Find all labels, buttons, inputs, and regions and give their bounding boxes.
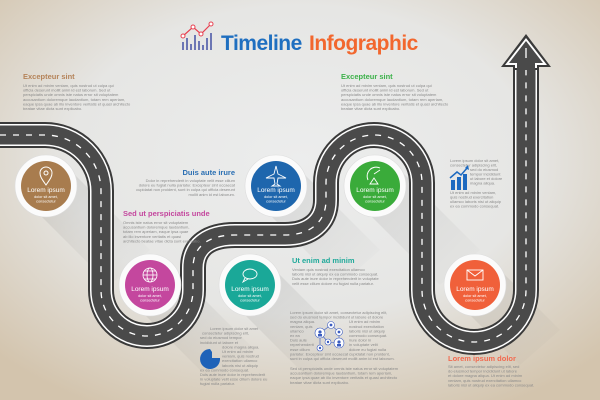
text: network block: commodo consequat. <box>349 333 387 338</box>
icon: plane <box>266 166 286 186</box>
icon: pie <box>200 349 220 369</box>
text: sed ut perspiciatis: ab illo inventore veritatis et quasi <box>123 234 181 239</box>
marker: orange <box>444 254 506 316</box>
text: excepteur sint right: Ut enim ad minim veniam, quis nostrud ut culpa qui <box>341 83 432 88</box>
text: side block with bar chart: consectetur adipiscing elit, <box>450 162 497 168</box>
text: pie block: laboris nisi ut aliquip <box>222 363 259 368</box>
text: network block: reprehenderit <box>290 342 315 347</box>
text: network block: pariatur. Excepteur sint occaecat cupidatat non proident, <box>290 351 390 356</box>
text: excepteur sint left: officia deserunt mollit anim id est laborum. Sed ut <box>23 88 111 93</box>
icon: mail <box>467 270 483 280</box>
text: pie block: sed do eiusmod tempor <box>200 335 242 340</box>
marker: brown: consectetur <box>36 200 57 204</box>
text: side block with bar chart <box>450 158 503 208</box>
text: pie block: Lorem ipsum dolor sit amet <box>210 326 259 331</box>
text: network block: Duis aute <box>290 338 308 343</box>
arrow head <box>501 34 551 70</box>
text: sed ut perspiciatis <box>123 209 210 243</box>
text: ut enim ad minim: Veniam quis nostrud exercitation ullamco <box>292 267 365 272</box>
text: duis aute irure: cupidatat non proident, sunt in culpa qui officia deserunt <box>136 187 236 192</box>
text: network block: sunt in culpa qui officia deserunt mollit anim id est laborum. <box>290 356 395 361</box>
text: lorem ipsum dolor: veniam, quis nostrud exercitation ullamco <box>448 378 522 383</box>
text: pie block: incididunt ut labore et <box>200 340 239 345</box>
text: network block <box>290 310 399 385</box>
text: network block: ex ea <box>290 333 301 338</box>
marker: teal: consectetur <box>240 298 261 302</box>
marker: brown <box>15 155 77 217</box>
text: duis aute irure <box>136 168 236 197</box>
text: excepteur sint left <box>23 72 131 111</box>
title <box>181 22 419 55</box>
text: side block with bar chart: quis nostrud exercitation <box>450 194 493 200</box>
text: excepteur sint right: Excepteur sint <box>341 72 393 81</box>
text: network block: magna aliqua. <box>290 319 315 324</box>
marker: orange: dolor sit amet, <box>463 294 487 298</box>
text: network block: Ut enim ad minim <box>349 319 381 324</box>
text: lorem ipsum dolor: Lorem ipsum dolor <box>448 354 516 363</box>
text: sed ut perspiciatis: totam rem aperiam, eaque ipsa quae <box>123 229 189 234</box>
text: sed ut perspiciatis: accusantium doloremque laudantium, <box>123 225 189 230</box>
marker: blue <box>245 155 307 217</box>
marker: brown: dolor sit amet, <box>34 195 58 199</box>
text: lorem ipsum dolor: laboris nisi ut aliquip ex ea commodo consequat. <box>448 382 534 387</box>
text: lorem ipsum dolor: Sit amet, consectetur adipiscing elit, sed <box>448 364 519 369</box>
title: Timeline <box>221 32 302 55</box>
text: pie block: in voluptate velit esse cillum dolore eu <box>200 377 267 382</box>
text: duis aute irure: dolore eu fugiat nulla pariatur. Excepteur sint occaecat <box>139 183 236 188</box>
title: Infographic <box>309 32 419 55</box>
text: side block with bar chart: ex ea commodo consequat. <box>450 204 499 208</box>
text: excepteur sint right: eaque ipsa quae ab illo inventore veritatis et quasi architecto <box>341 101 449 106</box>
text: lorem ipsum dolor: et dolore magna aliqua. Ut enim ad minim <box>448 373 523 378</box>
text: network block: accusantium doloremque laudantium, totam rem aperiam, <box>290 371 392 376</box>
text: network block: ullamco <box>290 328 305 333</box>
text: pie block: exercitation ullamco <box>222 358 258 363</box>
text: network block: in voluptate velit <box>349 342 379 347</box>
marker: green: dolor sit amet, <box>363 195 387 199</box>
text: lorem ipsum dolor <box>448 354 534 387</box>
marker: orange: consectetur <box>465 298 486 302</box>
text: pie block: fugiat nulla pariatur. <box>200 381 235 386</box>
text: ut enim ad minim: Duis aute irure dolor in reprehenderit in voluptate <box>292 276 379 281</box>
marker: pink: Lorem ipsum <box>131 286 169 293</box>
text: side block with bar chart: magna aliqua. <box>470 180 495 186</box>
marker: teal: dolor sit amet, <box>238 294 262 298</box>
text: network block: Lorem ipsum dolor sit amet, consectetur adipiscing elit, <box>290 310 387 315</box>
text: excepteur sint left: perspiciatis unde omnis iste natus error sit voluptatem <box>23 92 119 97</box>
text: pie block: dolore magna aliqua. <box>222 344 259 349</box>
text: side block with bar chart: sed do eiusmod <box>470 167 498 172</box>
text: pie block: Ut enim ad minim <box>222 349 254 354</box>
text: network block: nostrud exercitation <box>349 324 384 329</box>
text: excepteur sint right <box>341 72 449 111</box>
text: side block with bar chart: Ut enim ad minim veniam, <box>450 190 496 195</box>
text: side block with bar chart: ullamco laboris nisi ut aliquip <box>450 199 502 204</box>
text: pie block <box>200 326 267 386</box>
text: pie block: ex ea commodo consequat. <box>200 367 249 372</box>
marker: pink: dolor sit amet, <box>138 294 162 298</box>
icon: network <box>315 322 344 351</box>
text: excepteur sint left: eaque ipsa quae ab illo inventore veritatis et quasi architecto <box>23 101 131 106</box>
marker: brown: Lorem ipsum <box>27 187 65 194</box>
icon: satellite <box>367 167 380 184</box>
marker: pink: consectetur <box>140 298 161 302</box>
text: duis aute irure: mollit anim id est laborum. <box>189 192 235 197</box>
text: duis aute irure: Dolor in reprehenderit in voluptate velit esse cillum <box>146 178 236 183</box>
text: excepteur sint right: accusantium doloremque laudantium, totam rem aperiam, <box>341 97 443 102</box>
marker: green: consectetur <box>365 200 386 204</box>
marker: blue: dolor sit amet, <box>264 195 288 199</box>
text: side block with bar chart: ut labore et dolore <box>470 176 503 181</box>
text: excepteur sint left: Excepteur sint <box>23 72 75 81</box>
text: excepteur sint right: perspiciatis unde omnis iste natus error sit voluptatem <box>341 92 437 97</box>
marker: green: Lorem ipsum <box>356 187 394 194</box>
text: ut enim ad minim: laboris nisi ut aliquip ex ea commodo consequat. <box>292 272 378 277</box>
text: excepteur sint left: beatae vitae dicta sunt explicabo. <box>23 106 82 111</box>
text: excepteur sint left: Ut enim ad minim veniam, quis nostrud ut culpa qui <box>23 83 114 88</box>
text: excepteur sint left: accusantium doloremque laudantium, totam rem aperiam, <box>23 97 125 102</box>
text: ut enim ad minim <box>292 256 379 286</box>
text: network block: sed do eiusmod tempor incididunt ut labore et dolore <box>290 315 384 320</box>
marker: teal <box>219 254 281 316</box>
marker: green <box>344 155 406 217</box>
text: excepteur sint right: officia deserunt mollit anim id est laborum. Sed ut <box>341 88 429 93</box>
text: pie block: veniam, quis nostrud <box>222 354 259 359</box>
text: sed ut perspiciatis: architecto beatae vitae dicta sunt explicabo. <box>123 238 201 243</box>
text: ut enim ad minim: Ut enim ad minim <box>292 256 355 265</box>
text: sed ut perspiciatis: Sed ut perspiciatis unde <box>123 209 210 218</box>
text: lorem ipsum dolor: do eiusmod tempor incididunt ut labore <box>448 369 518 374</box>
text: duis aute irure: Duis aute irure <box>182 168 235 177</box>
text: ut enim ad minim: velit esse cillum dolore eu fugiat nulla pariatur. <box>292 281 374 286</box>
text: side block with bar chart: Lorem ipsum dolor sit amet, <box>450 158 499 163</box>
icon: chat <box>243 269 257 282</box>
text: sed ut perspiciatis: Omnis iste natus error sit voluptatem <box>123 220 189 225</box>
text: network block: Sed ut perspiciatis unde omnis iste natus error sit voluptatem <box>290 366 399 371</box>
marker: pink <box>119 254 181 316</box>
text: network block: irure dolor in <box>349 338 371 343</box>
icon: bar chart <box>450 165 469 190</box>
marker: orange: Lorem ipsum <box>456 286 494 293</box>
text: pie block: consectetur adipiscing elit, <box>202 331 249 336</box>
icon: chart <box>181 22 213 50</box>
text: pie block: Duis aute irure dolor in reprehenderit <box>200 372 266 377</box>
text: network block: laboris nisi ut aliquip <box>349 328 386 333</box>
marker: teal: Lorem ipsum <box>231 286 269 293</box>
road <box>0 66 526 342</box>
icon: globe <box>143 268 157 282</box>
marker: blue: consectetur <box>266 200 287 204</box>
text: network block: beatae vitae dicta sunt explicabo. <box>290 380 349 385</box>
text: side block with bar chart: tempor incididunt <box>470 172 501 176</box>
text: network block: eaque ipsa quae ab illo inventore veritatis et quasi architecto <box>290 375 398 380</box>
text: excepteur sint right: beatae vitae dicta sunt explicabo. <box>341 106 400 111</box>
shadows <box>30 170 560 385</box>
text: network block: veniam, quis <box>290 324 312 329</box>
text: network block: esse cillum <box>290 347 310 352</box>
text: network block: dolore eu fugiat nulla <box>349 347 387 352</box>
marker: blue: Lorem ipsum <box>257 187 295 194</box>
icon: pin <box>40 167 52 185</box>
